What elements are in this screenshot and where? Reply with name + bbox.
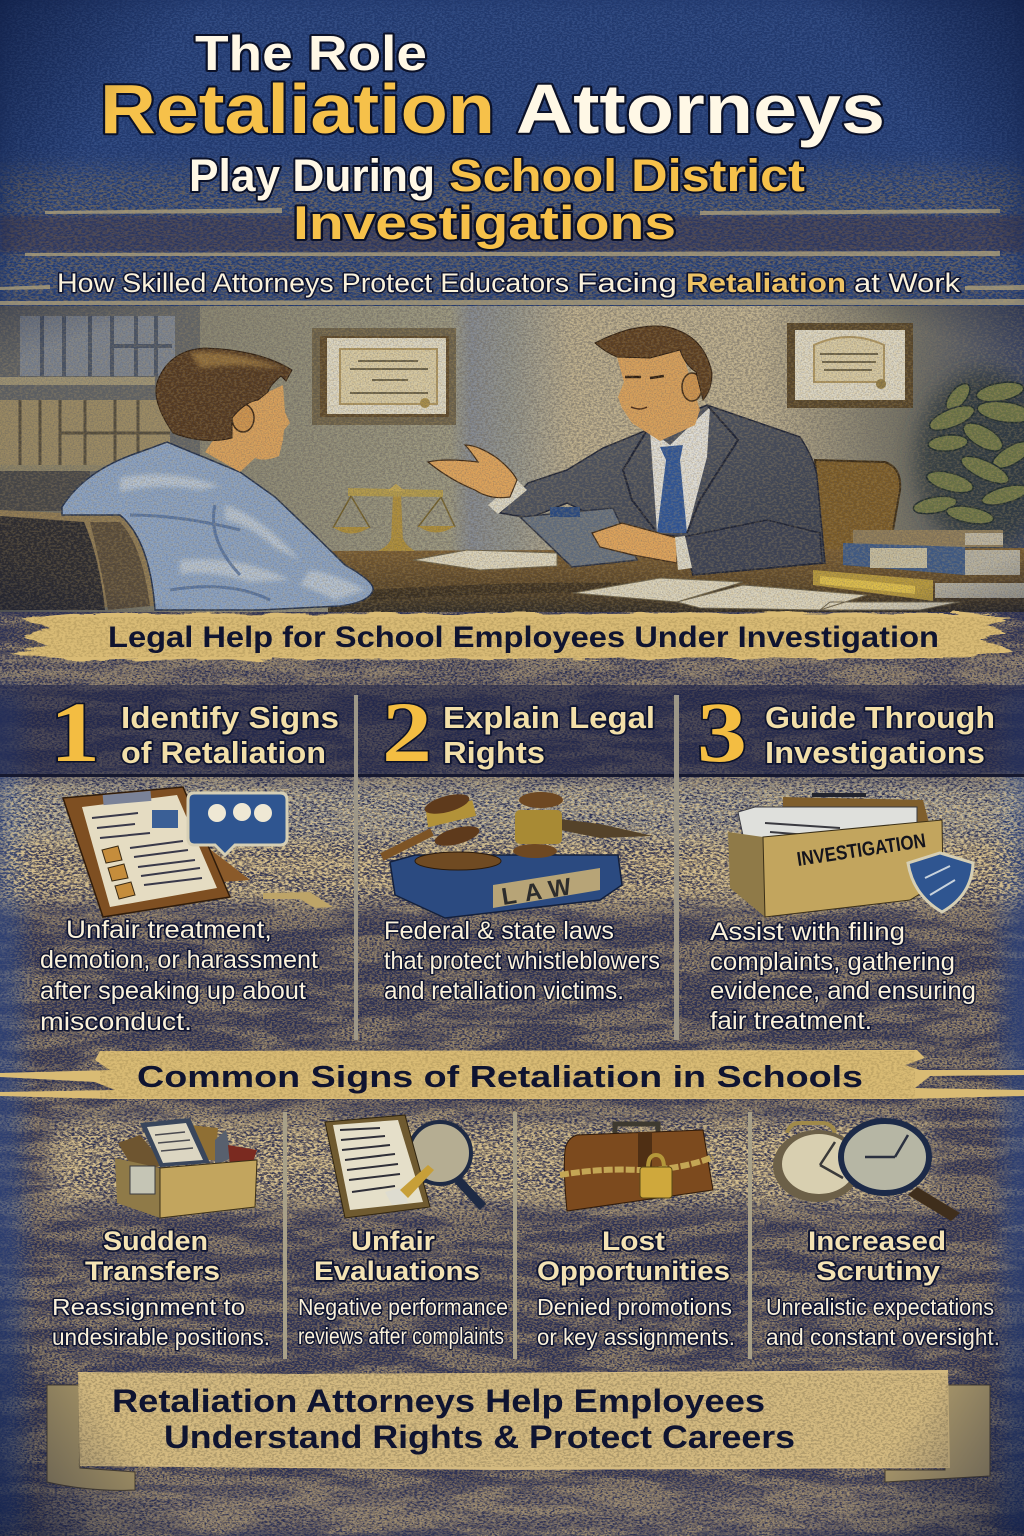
banner: closing scroll: Understand Rights & Protect Careers — [164, 1419, 795, 1455]
step 3: 3 — [697, 684, 747, 780]
title: Play During — [189, 150, 435, 201]
icon: investigation box with shield: INVESTIGATION — [795, 830, 927, 871]
sign: lost opportunities: or key assignments. — [537, 1324, 735, 1350]
text block — [384, 917, 660, 1005]
step 1 — [40, 684, 339, 1036]
text block — [710, 918, 976, 1035]
text block: complaints, gathering — [710, 948, 955, 976]
sign: increased scrutiny: and constant oversight. — [766, 1324, 1000, 1350]
step 1: Identify Signs — [121, 700, 339, 735]
attorney chair — [815, 460, 900, 575]
desk — [328, 548, 1024, 612]
icon: clock and magnifier — [773, 1121, 960, 1221]
subtitle: at Work — [854, 268, 961, 298]
step 1: 1 — [50, 684, 100, 780]
icon: evaluation form with magnifier — [325, 1115, 483, 1218]
sign: sudden transfers: Transfers — [85, 1256, 220, 1286]
subtitle — [57, 268, 961, 298]
icon: gavels and law book — [382, 790, 653, 918]
shirt and tie — [650, 407, 710, 533]
illustration: attorney consulting with educator — [0, 306, 1024, 612]
sign: unfair evaluations — [298, 1115, 508, 1349]
banner: legal help: Legal Help for School Employees Under Investigation — [108, 621, 939, 654]
sign: increased scrutiny: Scrutiny — [816, 1256, 940, 1286]
sign: lost opportunities: Opportunities — [537, 1256, 730, 1286]
title: Retaliation — [100, 70, 495, 148]
diploma right — [787, 323, 913, 408]
panel: common signs — [50, 1112, 1000, 1359]
subtitle: Retaliation — [686, 268, 846, 298]
header decorative bands — [0, 208, 1024, 305]
text block: demotion, or harassment — [40, 946, 318, 974]
text block: fair treatment. — [710, 1007, 872, 1035]
sign: sudden transfers — [52, 1118, 270, 1350]
sign: increased scrutiny — [766, 1121, 1000, 1350]
sign: lost opportunities: Lost — [602, 1226, 665, 1256]
books stack — [813, 530, 1024, 601]
banner: common signs: Common Signs of Retaliation in Schools — [137, 1059, 863, 1094]
face — [205, 385, 290, 472]
column dividers — [354, 695, 679, 1040]
hair — [595, 326, 712, 400]
sign: unfair evaluations: reviews after complaints — [298, 1323, 504, 1349]
sign: increased scrutiny: Increased — [808, 1226, 946, 1256]
sign: lost opportunities: Denied promotions — [537, 1294, 732, 1320]
client chair — [0, 510, 158, 610]
title: School District — [449, 150, 805, 201]
step 3 — [697, 684, 995, 1035]
step 2 — [382, 684, 660, 1005]
sign: sudden transfers: Reassignment to — [52, 1294, 245, 1320]
title: The Role — [195, 27, 427, 81]
sign: lost opportunities — [537, 1124, 735, 1350]
title: Investigations — [293, 196, 676, 249]
title: Attorneys — [516, 70, 885, 148]
sign: unfair evaluations: Evaluations — [314, 1256, 480, 1286]
icon: checklist clipboard with speech bubble — [63, 787, 333, 917]
plant — [912, 370, 1024, 550]
cuff and gesture hand — [488, 480, 527, 514]
icon: gavels and law book: LAW — [500, 873, 573, 911]
attorney — [428, 326, 825, 575]
column dividers — [283, 1112, 752, 1359]
scales of justice — [333, 484, 455, 551]
text block: Assist with filing — [710, 918, 905, 946]
banner: legal help — [10, 613, 1015, 660]
step 3: Investigations — [765, 735, 985, 770]
text block: misconduct. — [40, 1008, 192, 1036]
banner: closing scroll — [47, 1370, 990, 1490]
title — [100, 27, 885, 249]
arm — [683, 520, 822, 575]
face — [617, 345, 700, 441]
hair — [156, 348, 292, 441]
sign: sudden transfers: undesirable positions. — [52, 1324, 270, 1350]
sign: unfair evaluations: Unfair — [351, 1226, 436, 1256]
text block: Federal & state laws — [384, 917, 614, 945]
clipboard — [520, 508, 637, 567]
bookshelf — [0, 306, 200, 511]
text block: and retaliation victims. — [384, 977, 624, 1005]
suit — [500, 405, 825, 575]
step 2: 2 — [382, 684, 432, 780]
step 2: Explain Legal — [443, 700, 655, 735]
sign: unfair evaluations: Negative performance — [298, 1294, 508, 1320]
text block: evidence, and ensuring — [710, 977, 976, 1005]
sign: sudden transfers: Sudden — [103, 1226, 208, 1256]
step 2: Rights — [443, 735, 545, 770]
panel backgrounds — [0, 685, 1024, 906]
subtitle: Facing — [577, 268, 677, 298]
holding hand — [592, 523, 677, 563]
papers on desk — [413, 550, 960, 610]
panel: three roles — [0, 684, 1024, 1040]
shirt — [62, 442, 373, 610]
icon: moving box — [115, 1118, 257, 1218]
text block — [40, 916, 318, 1036]
text block: Unfair treatment, — [66, 916, 272, 944]
sign: increased scrutiny: Unrealistic expectations — [766, 1294, 994, 1320]
step 1: of Retaliation — [121, 735, 326, 770]
icon: chained briefcase — [560, 1124, 713, 1211]
diploma left — [312, 328, 456, 425]
client — [62, 348, 373, 610]
text block: that protect whistleblowers — [384, 947, 660, 975]
subtitle: How Skilled Attorneys Protect Educators — [57, 268, 569, 298]
banner: closing scroll: Retaliation Attorneys Help Employees — [112, 1383, 765, 1419]
text block: after speaking up about — [40, 977, 306, 1005]
step 3: Guide Through — [765, 700, 995, 735]
icon: investigation box with shield — [728, 795, 973, 917]
banner: common signs — [0, 1050, 1024, 1099]
